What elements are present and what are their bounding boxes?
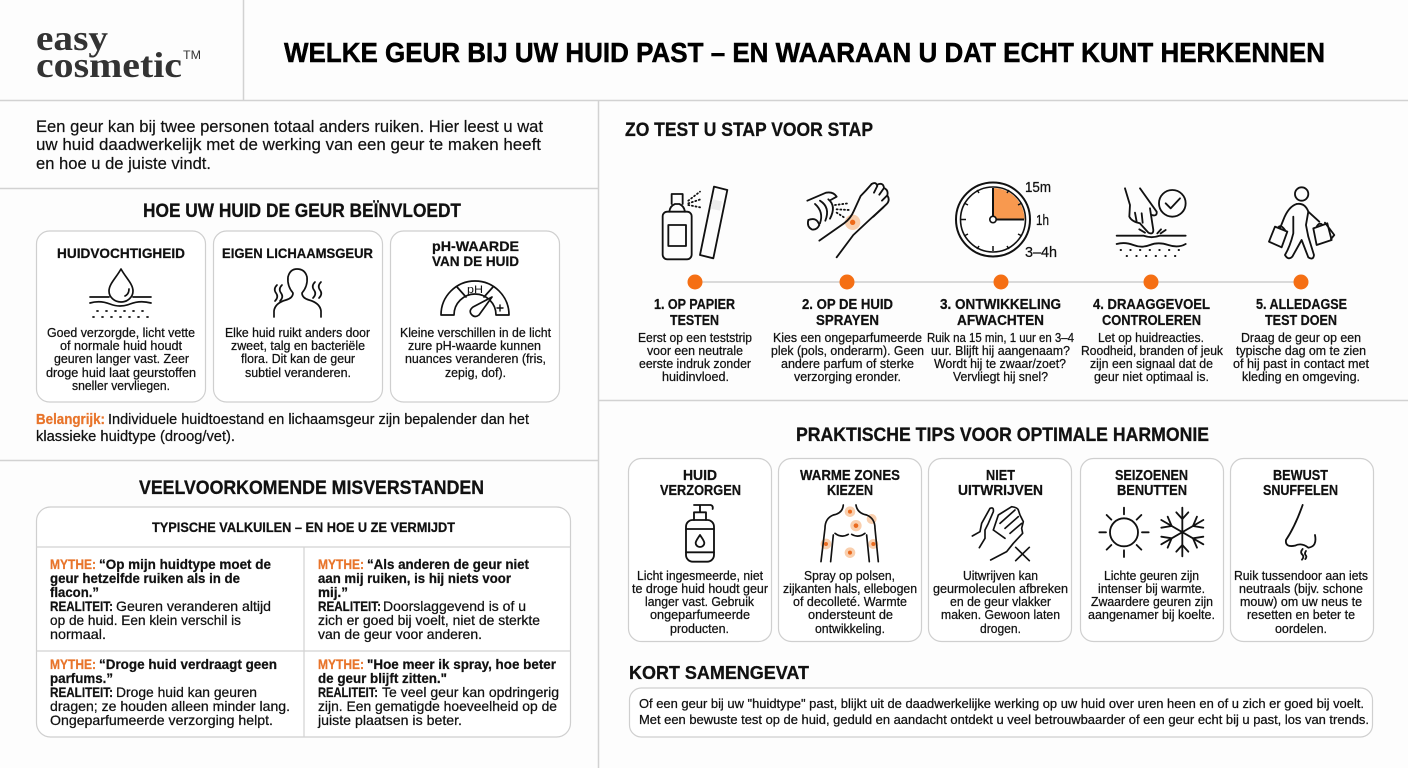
icon: water drop on skin — [90, 269, 151, 317]
tip: niet uitwrijven: geurmoleculen afbreken — [933, 581, 1068, 596]
step 4: Roodheid, branden of jeuk — [1081, 343, 1224, 358]
icon: spraying on wrist — [807, 183, 889, 257]
card: pH-waarde: zure pH-waarde kunnen — [408, 338, 541, 353]
myth 1: REALITEIT: — [50, 599, 113, 614]
card: eigen lichaamsgeur: EIGEN LICHAAMSGEUR — [222, 245, 373, 261]
callout: belangrijk: Belangrijk: — [36, 411, 105, 428]
card: pH-waarde: Kleine verschillen in de licht — [400, 325, 551, 340]
myth 2 — [318, 557, 540, 642]
step 1: eerste indruk zonder — [639, 356, 752, 371]
tip: niet uitwrijven: Uitwrijven kan — [963, 568, 1038, 583]
tip: niet uitwrijven — [928, 458, 1072, 642]
callout: belangrijk — [36, 411, 530, 445]
summary text box: Met een bewuste test op de huid, geduld en aandacht ontdekt u veel betrouwbaarder of een geur echt bij u past, los van trends. — [639, 712, 1369, 727]
myth 2: Doorslaggevend is of u — [383, 599, 526, 614]
icon: person walking with shopping bags — [1269, 187, 1334, 259]
step 3: Vervliegt hij snel? — [953, 369, 1048, 384]
step 1: TESTEN — [670, 313, 719, 329]
step 4: Let op huidreacties. — [1098, 330, 1204, 345]
card: pH-waarde — [390, 231, 560, 402]
myth 3 — [50, 657, 290, 728]
panel: kort samengevat — [629, 662, 1372, 737]
logo: easy cosmetic: TM — [183, 48, 201, 62]
step 3: AFWACHTEN — [957, 313, 1044, 329]
step 4: 4. DRAAGGEVOEL — [1093, 297, 1210, 313]
icon: hands rubbing with cross — [972, 507, 1029, 561]
myth 4: zijn. Een gematigde hoeveelheid op de — [318, 699, 557, 714]
tip: bewust snuffelen: resetten en beter te — [1247, 607, 1355, 622]
step 2 — [771, 183, 924, 384]
card: pH-waarde: nuances veranderen (fris, — [405, 351, 546, 366]
card: huidvochtigheid: HUIDVOCHTIGHEID — [57, 245, 185, 261]
myth 2: REALITEIT: — [318, 599, 381, 614]
card: huidvochtigheid — [36, 231, 206, 402]
step 2: Kies een ongeparfumeerde — [773, 330, 922, 345]
myth 2: aan mij ruiken, is hij niets voor — [318, 571, 512, 586]
step 4 — [1081, 188, 1224, 384]
step 5: typische dag om te zien — [1236, 343, 1366, 358]
icon: sun and snowflake — [1099, 508, 1203, 557]
heading: misconceptions: VEELVOORKOMENDE MISVERSTANDEN — [139, 477, 484, 499]
tip: huid verzorgen: ongeparfumeerde — [650, 607, 750, 622]
card: huidvochtigheid: sneller vervliegen. — [72, 378, 170, 393]
intro text: Een geur kan bij twee personen totaal anders ruiken. Hier leest u wat — [36, 117, 543, 136]
myth 1: “Op mijn huidtype moet de — [99, 557, 271, 572]
card: huidvochtigheid: of normale huid houdt — [60, 338, 182, 353]
tip: bewust snuffelen: Ruik tussendoor aan iets — [1234, 568, 1368, 583]
step 5: TEST DOEN — [1265, 313, 1337, 329]
card: huidvochtigheid: geuren langer vast. Zeer — [54, 351, 190, 366]
myth 1: Geuren veranderen altijd — [116, 599, 271, 614]
icon: clock with time marks — [956, 179, 1057, 261]
heading: step by step: ZO TEST U STAP VOOR STAP — [625, 119, 873, 141]
myth 4: juiste plaatsen is beter. — [317, 713, 462, 728]
myth 3: “Droge huid verdraagt geen — [99, 657, 277, 672]
step 2: andere parfum of sterke — [781, 356, 914, 371]
tip: warme zones kiezen: ontwikkeling. — [815, 621, 885, 636]
icon: clock with time marks: 1h — [1036, 212, 1049, 229]
step 2: SPRAYEN — [816, 313, 879, 329]
heading: practical tips: PRAKTISCHE TIPS VOOR OPTIMALE HARMONIE — [796, 424, 1209, 446]
card: eigen lichaamsgeur: zweet, talg en bacteriële — [231, 338, 365, 353]
step 1: voor een neutrale — [647, 343, 743, 358]
myth 3: Ongeparfumeerde verzorging helpt. — [50, 713, 273, 728]
card: huidvochtigheid: Goed verzorgde, licht vette — [47, 325, 195, 340]
myth 1: op de huid. Een klein verschil is — [50, 613, 241, 628]
tip: niet uitwrijven: maken. Gewoon laten — [941, 607, 1060, 622]
icon: nose — [1286, 505, 1315, 560]
icon: torso with warm zones — [821, 505, 878, 562]
table: myths and reality: TYPISCHE VALKUILEN – EN HOE U ZE VERMIJDT — [152, 520, 456, 535]
tip: niet uitwrijven: UITWRIJVEN — [958, 483, 1043, 499]
step 4: zijn een signaal dat de — [1090, 356, 1213, 371]
step 5 — [1233, 187, 1369, 384]
step 1: huidinvloed. — [662, 369, 729, 384]
myth 2: “Als anderen de geur niet — [367, 557, 529, 572]
tip: seizoenen benutten: SEIZOENEN — [1115, 468, 1188, 484]
myth 3: Droge huid kan geuren — [116, 685, 257, 700]
title: WELKE GEUR BIJ UW HUID PAST – EN WAARAAN U DAT ECHT KUNT HERKENNEN — [284, 37, 1325, 68]
myth 2: MYTHE: — [318, 557, 364, 572]
step 1 — [638, 187, 752, 384]
myth 3: dragen; ze houden alleen minder lang. — [50, 699, 290, 714]
logo: easy cosmetic — [36, 18, 201, 85]
step 5: kleding en omgeving. — [1242, 369, 1360, 384]
myth 1: geur hetzelfde ruiken als in de — [50, 571, 240, 586]
table: myths and reality — [36, 507, 571, 737]
myth 1: flacon.” — [50, 585, 99, 600]
step 3 — [927, 179, 1074, 384]
tip: bewust snuffelen: neutraals (bijv. schone — [1239, 581, 1363, 596]
icon: spray bottle and test strip — [663, 187, 727, 259]
card: pH-waarde: pH — [467, 284, 483, 296]
logo: easy cosmetic: cosmetic — [36, 45, 182, 85]
myth 2: van de geur voor anderen. — [318, 627, 482, 642]
step 1: Eerst op een teststrip — [638, 330, 752, 345]
intro text: uw huid daadwerkelijk met de werking van een geur te maken heeft — [36, 135, 541, 154]
icon: finger touching skin with check — [1117, 188, 1186, 256]
panel: veelvoorkomende misverstanden — [36, 477, 571, 737]
tip: seizoenen benutten: BENUTTEN — [1117, 483, 1187, 499]
tip: warme zones kiezen: of decolleté. Warmte — [793, 594, 907, 609]
icon: person with scent — [274, 269, 321, 317]
tip: bewust snuffelen — [1230, 458, 1374, 642]
step 2: verzorging eronder. — [794, 369, 901, 384]
tip: huid verzorgen: HUID — [683, 468, 717, 484]
tip: huid verzorgen: langer vast. Gebruik — [645, 594, 755, 609]
tip: warme zones kiezen: zijkanten hals, ellebogen — [783, 581, 917, 596]
myth 3: parfums.” — [50, 671, 113, 686]
card: huidvochtigheid: droge huid laat geurstoffen — [46, 365, 196, 380]
tip: seizoenen benutten — [1080, 458, 1224, 642]
card: pH-waarde: VAN DE HUID — [432, 253, 519, 269]
step 5: Draag de geur op een — [1241, 330, 1361, 345]
card: eigen lichaamsgeur: subtiel veranderen. — [245, 365, 351, 380]
panel: zo test u stap voor stap — [625, 119, 1369, 384]
tip: warme zones kiezen: Spray op polsen, — [804, 568, 895, 583]
summary text box — [630, 688, 1372, 737]
myth 4: MYTHE: — [318, 657, 364, 672]
step 5: 5. ALLEDAGSE — [1256, 297, 1347, 313]
myth 3: REALITEIT: — [50, 685, 113, 700]
panel: hoe uw huid de geur beinvloedt — [36, 199, 560, 445]
myth 2: mij.” — [318, 585, 348, 600]
card: eigen lichaamsgeur: flora. Dit kan de geur — [241, 351, 356, 366]
tip: niet uitwrijven: NIET — [986, 468, 1015, 484]
tip: huid verzorgen: producten. — [670, 621, 729, 636]
myth 4 — [317, 657, 559, 728]
step 4: CONTROLEREN — [1102, 313, 1201, 329]
myth 2: zich er goed bij voelt, niet de sterkte — [318, 613, 540, 628]
tip: bewust snuffelen: mouw) om uw neus te — [1240, 594, 1362, 609]
card: pH-waarde: pH-WAARDE — [432, 238, 519, 254]
tip: bewust snuffelen: BEWUST — [1273, 468, 1328, 484]
icon: clock with time marks: 3–4h — [1025, 244, 1057, 261]
tip: warme zones kiezen: WARME ZONES — [800, 468, 900, 484]
card: eigen lichaamsgeur — [214, 231, 382, 402]
logo: easy cosmetic: easy — [36, 18, 108, 58]
icon: pH gauge — [441, 281, 509, 316]
intro text: en hoe u de juiste vindt. — [36, 154, 211, 173]
tip: huid verzorgen: te droge huid houdt geur — [632, 581, 769, 596]
heading: summary: KORT SAMENGEVAT — [629, 662, 810, 683]
step 3: Ruik na 15 min, 1 uur en 3–4 — [927, 330, 1074, 345]
step 5: of hij past in contact met — [1233, 356, 1369, 371]
myth 1: normaal. — [50, 627, 106, 642]
tip: seizoenen benutten: aangenamer bij koelte. — [1088, 607, 1215, 622]
summary text box: Of een geur bij uw "huidtype" past, blijkt uit de daadwerkelijke werking op uw huid over uren heen en of u zich er goed bij voelt. — [639, 696, 1364, 711]
myth 4: REALITEIT: — [318, 685, 378, 700]
myth 1: MYTHE: — [50, 557, 96, 572]
panel: praktische tips — [628, 424, 1374, 642]
timeline — [688, 274, 1308, 290]
step 3: Wordt hij te zwaar/zoet? — [934, 356, 1066, 371]
heading: skin influence: HOE UW HUID DE GEUR BEÏNVLOEDT — [143, 199, 461, 222]
tip: niet uitwrijven: en de geur vlakker — [950, 594, 1052, 609]
myth 4: "Hoe meer ik spray, hoe beter — [367, 657, 557, 672]
tip: niet uitwrijven: drogen. — [980, 621, 1021, 636]
step 3: 3. ONTWIKKELING — [940, 297, 1061, 313]
myth 4: de geur blijft zitten." — [318, 671, 447, 686]
step 2: plek (pols, onderarm). Geen — [771, 343, 924, 358]
callout: belangrijk: klassieke huidtype (droog/vet). — [36, 428, 235, 445]
intro text — [36, 117, 543, 173]
tip: huid verzorgen — [628, 458, 772, 642]
myth 3: MYTHE: — [50, 657, 96, 672]
tip: seizoenen benutten: Zwaardere geuren zijn — [1091, 594, 1213, 609]
tip: seizoenen benutten: Lichte geuren zijn — [1104, 568, 1199, 583]
card: eigen lichaamsgeur: Elke huid ruikt anders door — [225, 325, 371, 340]
tip: huid verzorgen: VERZORGEN — [660, 483, 741, 499]
callout: belangrijk: Individuele huidtoestand en lichaamsgeur zijn bepalender dan het — [108, 411, 530, 428]
card: pH-waarde: zepig, dof). — [445, 365, 506, 380]
icon: clock with time marks: 15m — [1025, 179, 1051, 196]
tip: warme zones kiezen: ondersteunt de — [808, 607, 893, 622]
step 3: uur. Blijft hij aangenaam? — [931, 343, 1070, 358]
tip: warme zones kiezen — [778, 458, 922, 642]
myth 4: Te veel geur kan opdringerig — [382, 685, 559, 700]
icon: pump bottle — [686, 505, 714, 562]
step 1: 1. OP PAPIER — [654, 297, 735, 313]
tip: bewust snuffelen: oordelen. — [1275, 621, 1327, 636]
tip: warme zones kiezen: KIEZEN — [827, 483, 873, 499]
tip: bewust snuffelen: SNUFFELEN — [1263, 483, 1338, 499]
myth 1 — [50, 557, 271, 642]
tip: huid verzorgen: Licht ingesmeerde, niet — [637, 568, 763, 583]
tip: seizoenen benutten: intenser bij warmte. — [1098, 581, 1205, 596]
step 4: geur niet optimaal is. — [1094, 369, 1209, 384]
step 2: 2. OP DE HUID — [802, 297, 893, 313]
